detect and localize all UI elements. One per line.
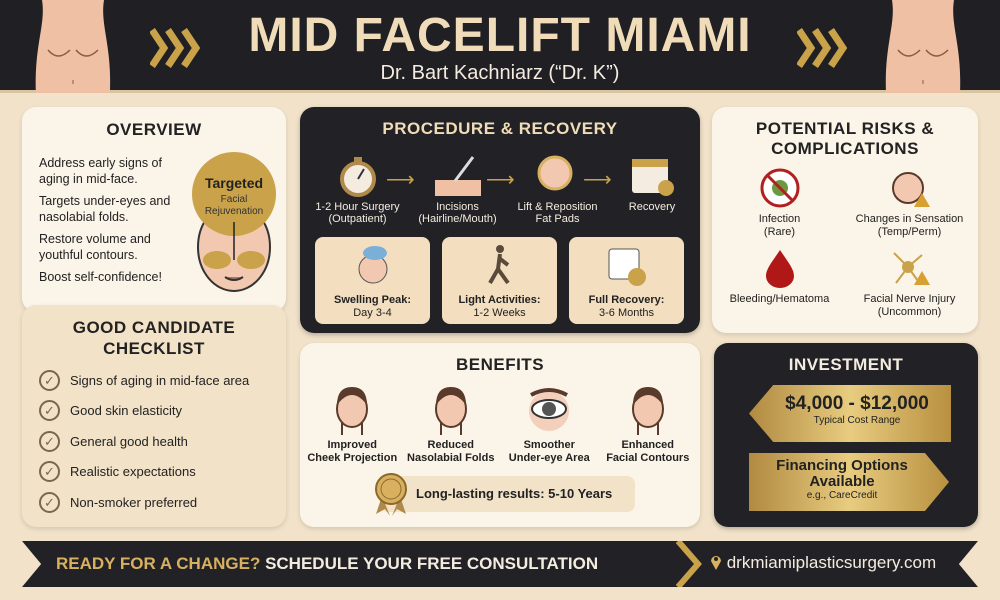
text: overview bullets: Targets under-eyes and nasolabial folds. <box>39 194 170 224</box>
tag: cost range <box>749 385 951 442</box>
panel: procedure & recovery: Incisions <box>436 201 479 213</box>
card: full recovery: Full Recovery: <box>589 294 664 306</box>
icon: incision <box>435 156 481 196</box>
panel: good candidate checklist <box>22 305 286 527</box>
card: swelling <box>315 237 430 324</box>
callout: long-lasting results: Long-lasting results: 5-10 Years <box>416 486 612 501</box>
risk: nerve injury: Facial Nerve Injury <box>864 293 955 305</box>
risk: infection <box>759 168 800 238</box>
list: checklist items: Non-smoker preferred <box>70 495 197 510</box>
step labels: (Outpatient) <box>328 213 387 225</box>
icon: targeted face <box>192 152 276 292</box>
card: light activities: 1-2 Weeks <box>473 307 526 319</box>
risk: sensation <box>856 172 963 238</box>
list: checklist items: General good health <box>70 434 188 449</box>
benefit icons: Nasolabial Folds <box>407 452 494 464</box>
panel: procedure & recovery: Lift & Reposition <box>517 201 598 213</box>
icon: face lift <box>538 156 572 190</box>
text: overview bullets: Boost self-confidence! <box>39 270 162 284</box>
benefit icons: Improved <box>327 439 377 451</box>
tag: financing: Available <box>809 473 875 490</box>
header band <box>0 0 1000 93</box>
list: checklist items: Realistic expectations <box>70 464 196 479</box>
icon: targeted face: Facial <box>221 194 247 205</box>
list: checklist items: ✓ <box>44 434 55 449</box>
risk: bleeding <box>730 250 830 305</box>
benefit icons <box>307 387 689 464</box>
panel: benefits <box>300 343 700 527</box>
benefit icons: Enhanced <box>621 439 674 451</box>
tag: financing <box>749 453 949 511</box>
panel: investment <box>714 343 978 527</box>
risk: nerve injury <box>864 252 956 318</box>
benefit icons: Smoother <box>524 439 575 451</box>
list: checklist items: Signs of aging in mid-face area <box>70 373 249 388</box>
tag: financing: Financing Options <box>776 457 908 474</box>
icon: medal <box>375 473 407 516</box>
text: overview bullets <box>39 156 170 284</box>
footer banner <box>22 541 978 587</box>
callout: long-lasting results <box>380 476 635 512</box>
arrow 3: ⟶ <box>583 169 612 191</box>
subtitle: Dr. Bart Kachniarz (“Dr. K”) <box>381 62 619 84</box>
card: full recovery: 3-6 Months <box>599 307 654 319</box>
risk: nerve injury: (Uncommon) <box>878 306 941 318</box>
risk: infection: (Rare) <box>764 226 795 238</box>
panel: procedure & recovery: Fat Pads <box>535 213 580 225</box>
icon: right chevrons <box>797 28 848 68</box>
icon: right torso <box>886 0 960 93</box>
heading: risks <box>756 119 934 158</box>
card: light activities <box>442 237 557 324</box>
risk: sensation: (Temp/Perm) <box>878 226 941 238</box>
tag: cost range: $4,000 - $12,000 <box>785 393 929 414</box>
icon: stopwatch <box>340 157 376 197</box>
list: checklist items <box>39 370 250 513</box>
icon: targeted face: Targeted <box>205 175 263 191</box>
step labels: 1-2 Hour Surgery <box>315 201 400 213</box>
heading: checklist: CHECKLIST <box>103 339 205 358</box>
website: drkmiamiplasticsurgery.com <box>727 553 936 572</box>
list: checklist items: Good skin elasticity <box>70 403 182 418</box>
card: full recovery <box>569 237 684 324</box>
icon: left torso <box>36 0 110 93</box>
tag: financing: e.g., CareCredit <box>807 490 877 501</box>
heading: investment: INVESTMENT <box>789 355 903 374</box>
heading: risks: POTENTIAL RISKS & <box>756 119 934 138</box>
icon: left chevrons <box>150 28 200 68</box>
heading: benefits: BENEFITS <box>456 355 544 374</box>
benefit icons: Facial Contours <box>606 452 689 464</box>
risk: infection: Infection <box>759 213 800 225</box>
panel: procedure & recovery: Recovery <box>629 201 675 213</box>
heading: checklist <box>73 318 235 358</box>
panel: procedure & recovery: (Hairline/Mouth) <box>418 213 497 225</box>
tag: cost range: Typical Cost Range <box>814 415 900 426</box>
text: overview bullets: Address early signs of aging in mid-face. <box>39 156 162 186</box>
card: light activities: Light Activities: <box>458 294 541 306</box>
step labels <box>315 201 400 225</box>
panel: overview <box>22 107 286 312</box>
heading: risks: COMPLICATIONS <box>771 139 919 158</box>
benefit icons: Under-eye Area <box>509 452 590 464</box>
call to action: READY FOR A CHANGE? SCHEDULE YOUR FREE CONSULTATION <box>56 554 598 573</box>
title: MID FACELIFT MIAMI <box>248 9 752 62</box>
icon: targeted face: Rejuvenation <box>205 206 263 217</box>
arrow 1: ⟶ <box>386 169 415 191</box>
panel: procedure & recovery <box>300 107 700 333</box>
heading: overview: OVERVIEW <box>106 120 202 139</box>
arrow 2: ⟶ <box>486 169 515 191</box>
icon: calendar <box>632 159 674 196</box>
icon: gold chevron separator <box>676 541 702 587</box>
card: swelling: Swelling Peak: <box>334 294 411 306</box>
list: checklist items: ✓ <box>44 495 55 510</box>
heading: procedure: PROCEDURE & RECOVERY <box>382 119 618 138</box>
risk: bleeding: Bleeding/Hematoma <box>730 293 829 305</box>
heading: checklist: GOOD CANDIDATE <box>73 318 235 337</box>
text: overview bullets: Restore volume and youthful contours. <box>39 232 151 262</box>
list: checklist items: ✓ <box>44 403 55 418</box>
panel: risks <box>712 107 978 333</box>
benefit icons: Reduced <box>428 439 474 451</box>
list: checklist items: ✓ <box>44 373 55 388</box>
benefit icons: Cheek Projection <box>307 452 397 464</box>
card: swelling: Day 3-4 <box>353 307 392 319</box>
risk: sensation: Changes in Sensation <box>856 213 963 225</box>
list: checklist items: ✓ <box>44 464 55 479</box>
